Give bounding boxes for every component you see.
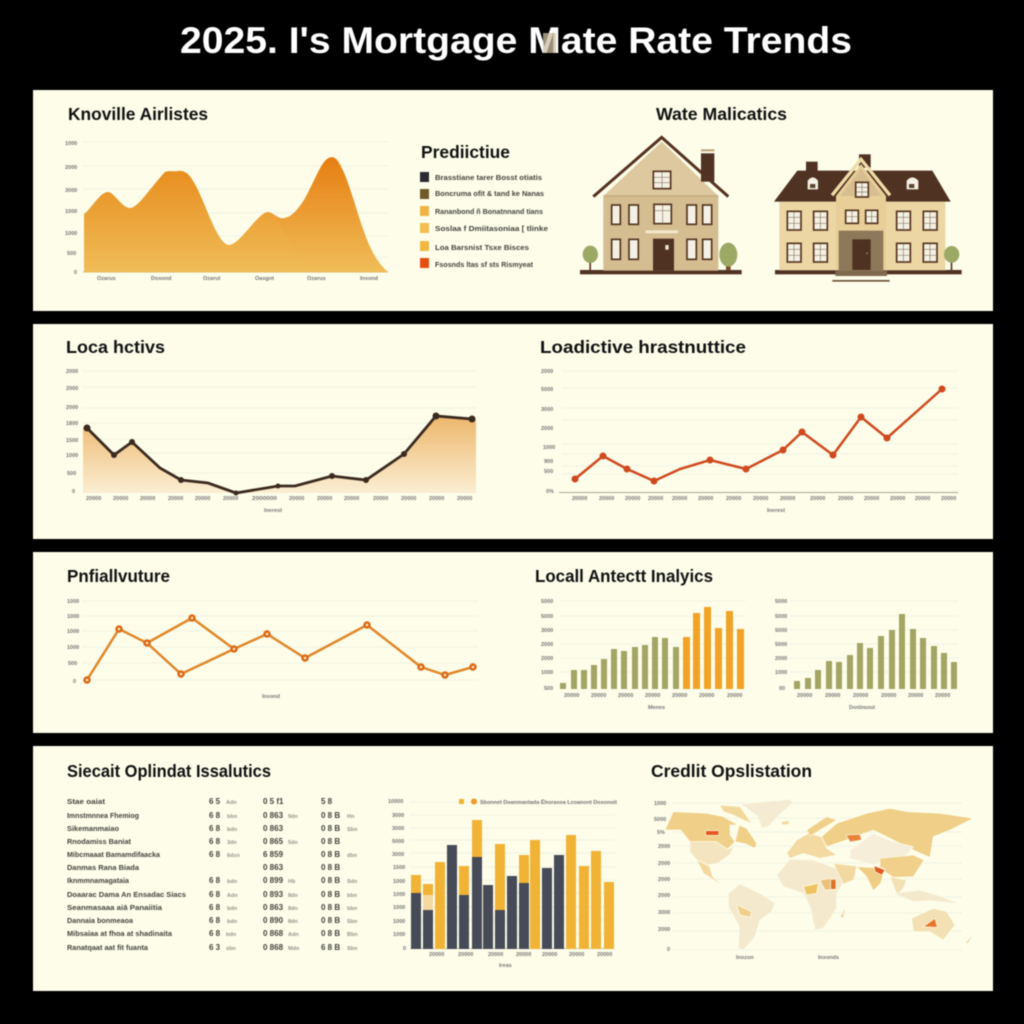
chart: olive bars: 5000 [775,642,787,648]
legend swatches [420,172,429,268]
heading: red line chart: Loadictive hrastnuttice [540,337,746,357]
chart: olive bars: 2000 [775,656,787,662]
table values: 0 863 [263,811,284,820]
chart: red line: 2000 [541,369,553,375]
area chart: 1000 [65,141,77,147]
chart: dark line over orange area: 20000 [401,496,416,502]
area chart: 2000 [65,165,77,171]
map: Russia highlight [846,834,862,842]
world map: 2000 [658,861,670,867]
panel: top row [33,90,993,311]
table values: 0 863 [263,824,284,833]
area chart: Oaxgnt [255,276,274,282]
chart: stacked bars: 20000 [569,952,584,958]
chart: olive and orange bars: 20000 [645,693,660,699]
world map: 2000 [658,893,670,899]
world map: 5000 [654,817,666,823]
table values: 0 5 f1 [263,797,284,806]
chart: stacked bars: 20000 [516,952,531,958]
world map: Inxonds [818,955,839,961]
legend labels: Loa Barsnist Tsxe Bisces [435,243,529,252]
chart: red line: 20000 [941,496,956,502]
chart: stacked bars: 1000 [393,892,405,898]
chart: red line: 20000 [726,496,741,502]
table units: bdn [227,827,238,833]
chart: olive bars: 1000 [775,670,787,676]
chart: orange line: 0 [73,679,76,685]
chart: stacked bars: 3000 [392,852,404,858]
map: Mexico [697,860,725,887]
chart: dark line over orange area: 20000 [86,496,101,502]
table values: 0 8 B [321,890,340,899]
chart: red line: 20000 [599,496,614,502]
chart: olive bars: 5000 [775,628,787,634]
chart: dark line over orange area: 2000000 [252,496,277,502]
chart: red line: 1000 [543,445,555,451]
chart: dark line over orange area: 1500 [66,438,78,444]
chart: stacked bars: 3000 [392,826,404,832]
map: Caribbean [713,865,732,873]
table values: 0 863 [263,903,284,912]
chart: red line: 20000 [672,496,687,502]
chart: stacked bars: 20000 [542,952,557,958]
table values: 0 865 [263,837,284,846]
chart: orange line: 1000 [67,629,79,635]
chart: red line: 0% [546,489,554,495]
chart: red line: 5000 [541,387,553,393]
table row labels: Ranatqaat aat fit fuanta [67,943,149,952]
table values: 6 859 [263,850,284,859]
table values: 6 8 [209,811,221,820]
chart: stacked bars: 1000 [393,932,405,938]
table row labels: Sikemanmaiao [67,824,119,833]
chart legend: Sbonnet Doanmantada Ēhoraxoa Lcoanont Doxonoit [480,799,617,806]
table units: bdn [226,932,237,938]
table units: Sbn [347,946,358,952]
table units: dbn [347,853,358,859]
chart: orange line: 500 [68,661,77,667]
chart: olive and orange bars: 20000 [672,693,687,699]
table units: 3dn [227,840,237,846]
map: Canada and Alaska [665,812,757,849]
chart: stacked bars: 1000 [393,905,405,911]
chart: stacked bars: 1000 [393,879,405,885]
map: Hudson Bay [730,825,739,842]
table units: Adn [226,800,237,806]
table values: 6 3 [209,943,221,952]
table values: 5 8 [321,797,333,806]
chart: dark line over orange area: 20000 [140,496,155,502]
table units: Hn [347,814,355,820]
chart: dark line over orange area [66,369,476,514]
chart: dark line over orange area: 20000 [429,496,444,502]
table values: 6 8 [209,916,221,925]
table values: 6 8 [209,903,221,912]
table values: 0 868 [263,929,284,938]
chart: red line: 20000 [864,496,879,502]
chart: stacked bars: 3000 [392,813,404,819]
chart: olive and orange bars: 3000 [541,628,553,634]
table units: Hb [288,879,296,885]
area chart [65,141,388,282]
chart: olive and orange bars: 20000 [564,693,579,699]
table values: 0 8 B [321,903,340,912]
table values: 0 8 B [321,929,340,938]
table units: 8dn [288,906,298,912]
chart: dark line over orange area: 0 [72,489,75,495]
chart: olive and orange bars: Menes [648,705,665,711]
heading: bar charts: Locall Antectt Inalyics [535,566,713,586]
table units: Sbn [347,827,358,833]
chart: dark line over orange area: 20000 [168,496,183,502]
map: Australia [912,908,955,940]
map: Greenland [740,799,793,828]
map: Central Asia [850,833,913,865]
heading: table: Siecait Oplindat Issalutics [67,761,271,781]
table values: 0 8 B [321,824,340,833]
chart: dark line over orange area: 2000 [66,369,78,375]
chart: stacked bars: Ireas [499,963,512,969]
chart: stacked bars [388,798,617,969]
chart: orange line: 1000 [67,645,79,651]
table values: 0 890 [263,916,284,925]
heading: map: Credlit Opslistation [651,761,812,781]
table units: Bbn [347,932,358,938]
chart: red line [541,369,958,514]
table values: 6 5 [209,797,221,806]
table row labels: Iknmmnamagataia [67,876,130,885]
world map: 0 [667,947,670,953]
table units: bdn [227,919,238,925]
map: Canada highlight [706,831,719,835]
chart: red line: 900 [544,459,553,465]
chart: stacked bars: 20000 [458,952,473,958]
heading: houses: Wate Malicatics [656,104,787,124]
chart: red line: 20000 [698,496,713,502]
chart: dark line over orange area: 20000 [113,496,128,502]
table row labels: Doaarac Dama An Ensadac Siacs [67,890,186,899]
chart: stacked bars: 20000 [488,952,503,958]
area chart: 1000 [65,231,77,237]
chart: red line: 20000 [753,496,768,502]
world map: 5% [657,830,665,836]
world map: 2000 [658,844,670,850]
table values: 0 8 B [321,837,340,846]
chart: olive and orange bars: 20000 [727,693,742,699]
legend labels: Rananbond ñ Bonatnnand tians [435,207,543,216]
chart: olive and orange bars [541,599,745,711]
world map [654,799,973,961]
chart: red line: 20000 [915,496,930,502]
table values: 6 8 [209,890,221,899]
legend labels [435,173,548,269]
chart: dark line over orange area: 20000 [373,496,388,502]
chart: olive bars: 20000 [935,693,950,699]
map: Canadian islands [720,805,752,823]
panel: middle charts [33,552,993,733]
table values: 6 8 [209,837,221,846]
heading: area line chart: Loca hctivs [66,337,165,357]
table values: 6 8 [209,876,221,885]
area chart: Ozarus [307,276,326,282]
chart: orange line: 1000 [67,614,79,620]
chart: olive bars: 20000 [797,693,812,699]
map: Indonesia [893,890,960,904]
chart: red line: Inerest [767,508,785,514]
table row labels: Stae oaiat [67,797,106,806]
chart: orange line [67,599,478,700]
area chart: Doxond [151,276,171,282]
table row labels: Dannaia bonmeaoa [67,916,134,925]
map: Scandinavia [807,817,837,836]
chart: olive and orange bars: 5000 [541,614,553,620]
table row labels: Rnodamiss Baniat [67,837,131,846]
table units: bbn [227,814,238,820]
table units: Mdn [288,946,300,952]
chart: olive and orange bars: 500 [544,686,553,692]
chart: red line: 20000 [890,496,905,502]
table units: Sbn [347,919,358,925]
world map: 3000 [658,910,670,916]
chart: dark line over orange area: 1800 [66,421,78,427]
chart: olive and orange bars: 1000 [541,670,553,676]
chart: olive bars [775,599,958,711]
legend labels: Brasstiane tarer Bosst otiatis [435,173,542,182]
table values: 0 863 [263,863,284,872]
area chart: Ozarut [203,276,221,282]
chart: dark line over orange area: 20000 [289,496,304,502]
table values: 0 868 [263,943,284,952]
table units: 9dn [288,814,298,820]
table units: Adn [227,893,238,899]
chart: orange line: Inxond [262,694,280,700]
chart: red line: 20000 [838,496,853,502]
chart: olive and orange bars: 5000 [541,599,553,605]
chart: olive bars: 00 [779,686,785,692]
chart: olive and orange bars: 2000 [541,656,553,662]
table row labels: Mibsaiaa at fhoa at shadinaita [67,929,173,938]
chart: dark line over orange area: 20000 [344,496,359,502]
heading: area chart: Knoville Airlistes [68,104,208,124]
chart: olive and orange bars: 20000 [699,693,714,699]
data table [67,797,358,952]
chart: dark line over orange area: Inerest [264,508,282,514]
chart: dark line over orange area: 20000 [195,496,210,502]
table values: 0 8 B [321,811,340,820]
chart: stacked bars: 1500 [393,865,405,871]
table row labels: Danmas Rana Biada [67,863,140,872]
table units [226,800,358,952]
chart: olive bars: 5000 [775,599,787,605]
chart: red line: 20000 [572,496,587,502]
area chart: 3000 [65,188,77,194]
map: Africa [777,859,844,930]
legend labels: Soslaa f Dmiitasoniaa [ tlinke [435,224,548,233]
map: Iceland [781,821,789,825]
chart: stacked bars: 0 [403,946,406,952]
area chart: Ozarus [97,276,116,282]
chart: stacked bars: 20000 [429,952,444,958]
chart: dark line over orange area: 2000 [66,386,78,392]
chart: red line: 20000 [648,496,663,502]
chart: red line: 20000 [810,496,825,502]
map: Europe [787,833,837,858]
chart: dark line over orange area: 20000 [317,496,332,502]
table row labels: Seanmasaaa aiā Panaiitia [67,903,163,912]
table values: 6 8 [209,850,221,859]
world map: 1000 [654,801,666,807]
chart: dark line over orange area: 2000 [66,405,78,411]
map: East Africa highlight [831,879,836,889]
table values: 0 8 B [321,916,340,925]
table row labels: Mibcmaaat Bamamdifaacka [67,850,161,859]
table units: 8dn [288,893,298,899]
table values: 0 893 [263,890,284,899]
table values: 6 8 [209,929,221,938]
table values: 0 8 B [321,876,340,885]
chart legend [459,798,617,806]
chart: olive bars: 20000 [853,693,868,699]
chart: stacked bars: 1000 [393,919,405,925]
map: China [880,855,924,877]
map: South America highlight [737,905,752,917]
map: Australia highlight [923,918,937,927]
table values: 0 8 B [321,863,340,872]
legend heading: Prediictiue [421,142,510,162]
chart: red line: 500 [544,469,553,475]
table units: bdn [227,879,238,885]
table values [209,797,340,952]
chart: olive bars: 5000 [775,614,787,620]
table units: sbn [226,946,236,952]
map: India [857,867,885,891]
chart: olive bars: 20000 [881,693,896,699]
panel: bottom row [33,746,993,991]
area chart: Inxond [360,276,378,282]
map: Russia [822,808,973,857]
chart: red line: 20000 [625,496,640,502]
world map: Inozon [736,955,754,961]
legend labels: Boncruma ofit & tand ke Nanas [435,189,544,198]
table units: 5dn [288,840,298,846]
chart: dark line over orange area: 20000 [223,496,238,502]
chart: stacked bars: 20000 [597,952,612,958]
title: 2025. I's Mortgage Mate Rate Trends [180,20,852,61]
table row labels [67,797,186,952]
chart: dark line over orange area: 500 [67,471,76,477]
map: United States [690,842,734,865]
map: Madagascar [840,907,846,918]
table values: 0 8 B [321,850,340,859]
area chart: 0 [74,270,77,276]
map: Middle East [833,863,857,884]
chart: olive and orange bars: 20000 [618,693,633,699]
table units: Adn [288,932,299,938]
table values: 0 899 [263,876,284,885]
area chart: 1000 [65,209,77,215]
map: India highlight [874,866,885,875]
table units: 6dsn [227,853,240,859]
map: Southeast Asia [890,877,907,895]
illustration: first house [580,137,742,274]
world map: 2000 [658,927,670,933]
table units: bbn [347,906,358,912]
table units: 8dn [288,919,298,925]
chart: orange line: 1000 [67,599,79,605]
world map: 2000 [658,877,670,883]
table units: Sdn [347,879,358,885]
chart: olive bars: Dontinuout [849,705,875,711]
chart: red line: 20000 [780,496,795,502]
heading: orange line chart: Pnfiallvuture [67,566,170,586]
chart: olive and orange bars: 2000 [541,642,553,648]
table values: 6 8 [209,824,221,833]
area chart: 500 [67,251,76,257]
table units: bdn [227,906,238,912]
map: South America [728,884,775,950]
chart: red line: 3000 [541,407,553,413]
chart: olive and orange bars: 20000 [591,693,606,699]
legend labels: Fsosnds ltas sf sts Rismyeat [435,260,533,269]
table units: bbn [347,893,358,899]
illustration: second house [774,154,962,282]
chart: stacked bars: 5000 [392,839,404,845]
chart: stacked bars: 10000 [388,799,403,805]
chart: red line: 2000 [541,426,553,432]
map: West Africa [803,883,818,895]
panel: area line chart [33,324,993,539]
table row labels: Imnstmnnea Fhemiog [67,811,139,820]
map: East Africa [820,878,837,890]
chart: olive bars: 20000 [908,693,923,699]
table values: 6 8 B [321,943,340,952]
chart: olive bars: 20000 [825,693,840,699]
legend [420,142,548,269]
chart: dark line over orange area: 20000 [457,496,472,502]
chart: dark line over orange area: 1000 [66,453,78,459]
map: New Zealand [965,933,973,943]
